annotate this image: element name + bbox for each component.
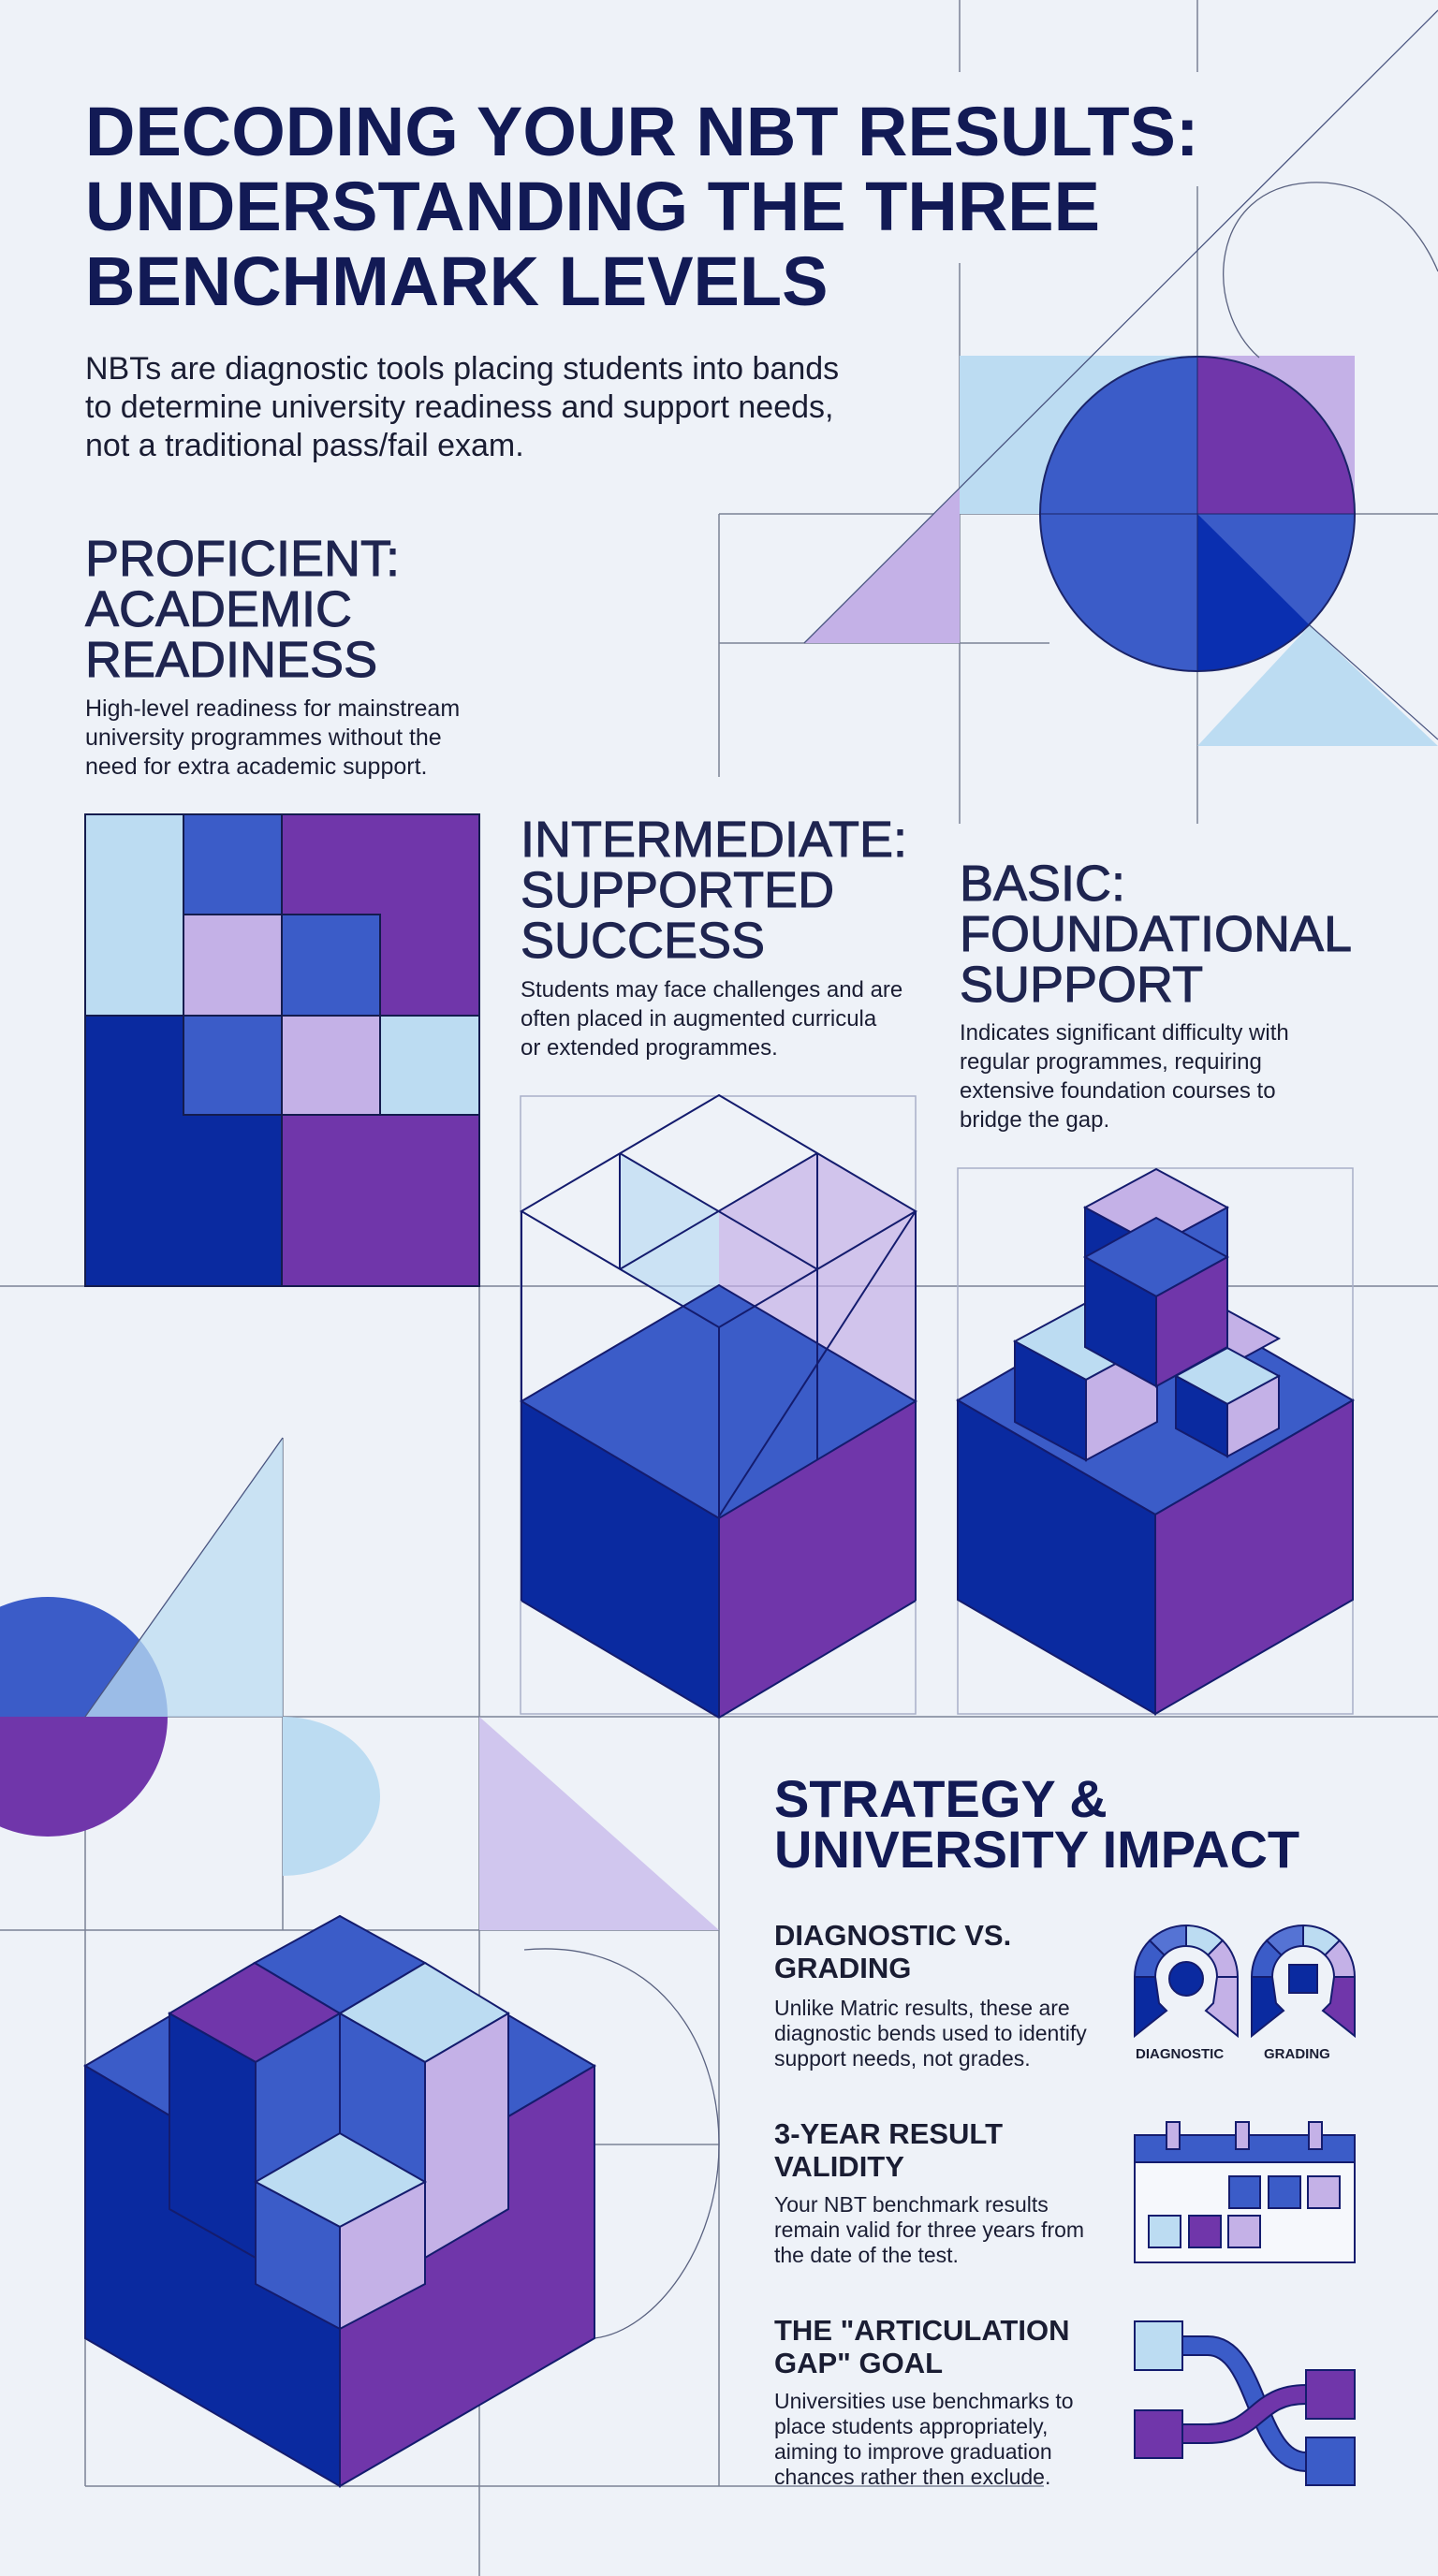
item: diagnostic vs grading: diagnostic bends used to identify xyxy=(774,2021,1087,2045)
text: proficient: High-level readiness for mainstream xyxy=(85,695,460,722)
heading: basic: FOUNDATIONAL xyxy=(960,906,1352,962)
title: DECODING YOUR NBT RESULTS: xyxy=(85,93,1199,170)
heading: intermediate: SUPPORTED xyxy=(521,862,834,918)
item: validity: VALIDITY xyxy=(774,2150,904,2183)
text: basic xyxy=(960,1020,1289,1133)
item: articulation gap: place students appropriately, xyxy=(774,2414,1048,2438)
heading: strategy xyxy=(774,1769,1299,1879)
item: articulation gap: chances rather then exclude. xyxy=(774,2465,1050,2489)
heading: intermediate xyxy=(521,812,907,969)
icon labels: GRADING xyxy=(1264,2046,1330,2062)
item: diagnostic vs grading: DIAGNOSTIC VS. xyxy=(774,1919,1011,1952)
item: diagnostic vs grading: GRADING xyxy=(774,1952,911,1984)
text: intermediate: or extended programmes. xyxy=(521,1035,778,1061)
icon: articulation xyxy=(1135,2321,1355,2485)
heading: intermediate: INTERMEDIATE: xyxy=(521,812,907,868)
title xyxy=(85,93,1199,320)
heading: basic: BASIC: xyxy=(960,856,1125,912)
icon labels xyxy=(1136,2046,1330,2062)
subtitle: to determine university readiness and support needs, xyxy=(85,389,833,425)
item: validity: Your NBT benchmark results xyxy=(774,2192,1049,2217)
heading: proficient: PROFICIENT: xyxy=(85,531,400,587)
item: validity: remain valid for three years from xyxy=(774,2217,1084,2242)
icon labels: DIAGNOSTIC xyxy=(1136,2046,1224,2062)
subtitle xyxy=(85,351,839,463)
intermediate cube xyxy=(521,1095,916,1718)
item: articulation gap: GAP" GOAL xyxy=(774,2347,943,2379)
icon: diagnostic xyxy=(1135,1925,1238,2036)
heading: basic: SUPPORT xyxy=(960,957,1203,1013)
text: basic: Indicates significant difficulty with xyxy=(960,1020,1289,1046)
item: articulation gap xyxy=(774,2314,1074,2489)
item: diagnostic vs grading: Unlike Matric results, these are xyxy=(774,1996,1070,2020)
bottom-left stacked block xyxy=(85,1916,594,2486)
subtitle: not a traditional pass/fail exam. xyxy=(85,428,524,463)
proficient mosaic xyxy=(85,814,479,1286)
item: diagnostic vs grading xyxy=(774,1919,1087,2071)
item: validity: 3-YEAR RESULT xyxy=(774,2117,1003,2150)
title: UNDERSTANDING THE THREE xyxy=(85,168,1100,245)
text: proficient xyxy=(85,695,460,780)
item: validity xyxy=(774,2117,1084,2267)
text: basic: extensive foundation courses to xyxy=(960,1078,1276,1104)
title: BENCHMARK LEVELS xyxy=(85,242,828,320)
basic cube xyxy=(958,1168,1353,1714)
item: diagnostic vs grading: support needs, not grades. xyxy=(774,2046,1031,2071)
heading: proficient: READINESS xyxy=(85,632,377,688)
item: validity: the date of the test. xyxy=(774,2243,959,2267)
icon: calendar xyxy=(1135,2122,1355,2262)
text: proficient: need for extra academic support. xyxy=(85,754,427,780)
decor: top-right geometry xyxy=(804,10,1438,746)
text: basic: regular programmes, requiring xyxy=(960,1049,1262,1075)
heading: proficient: ACADEMIC xyxy=(85,581,352,637)
text: intermediate xyxy=(521,977,902,1061)
text: proficient: university programmes without the xyxy=(85,724,442,751)
heading: intermediate: SUCCESS xyxy=(521,913,765,969)
item: articulation gap: aiming to improve graduation xyxy=(774,2439,1052,2464)
item: articulation gap: THE "ARTICULATION xyxy=(774,2314,1069,2347)
subtitle: NBTs are diagnostic tools placing students into bands xyxy=(85,351,839,387)
heading: strategy: STRATEGY & xyxy=(774,1769,1108,1828)
text: basic: bridge the gap. xyxy=(960,1107,1109,1133)
heading: strategy: UNIVERSITY IMPACT xyxy=(774,1820,1299,1879)
text: intermediate: Students may face challenges and are xyxy=(521,977,902,1003)
heading: proficient xyxy=(84,531,400,688)
heading: basic xyxy=(960,856,1352,1013)
icon: grading xyxy=(1252,1925,1355,2036)
text: intermediate: often placed in augmented curricula xyxy=(521,1006,876,1032)
decor: left shapes xyxy=(0,1438,719,2338)
item: articulation gap: Universities use benchmarks to xyxy=(774,2389,1074,2413)
